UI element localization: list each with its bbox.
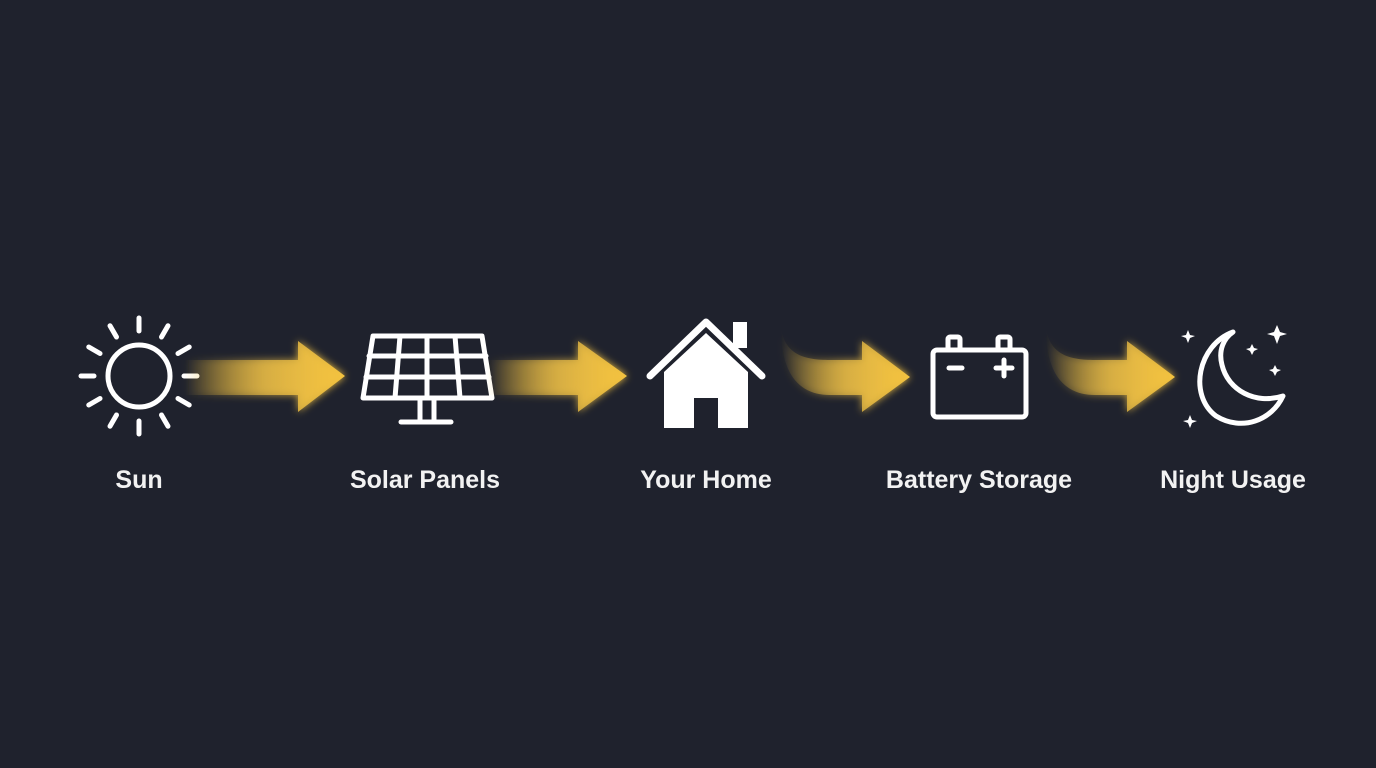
arrow: battery to night (curved) — [1046, 328, 1175, 412]
arrow: panels to home — [488, 341, 627, 412]
label: Your Home: Your Home — [640, 466, 772, 494]
label: Battery Storage: Battery Storage — [886, 466, 1072, 494]
icon: house — [650, 322, 762, 428]
icon: battery — [933, 337, 1026, 417]
icon: moon and stars — [1181, 325, 1287, 428]
label: Night Usage: Night Usage — [1160, 466, 1306, 494]
label: Sun: Sun — [115, 466, 163, 494]
arrow: sun to panels — [185, 341, 345, 412]
arrow: home to battery (curved) — [781, 328, 910, 412]
icon: solar panel — [363, 336, 492, 422]
label: Solar Panels: Solar Panels — [350, 466, 500, 494]
icon: sun — [81, 318, 197, 434]
